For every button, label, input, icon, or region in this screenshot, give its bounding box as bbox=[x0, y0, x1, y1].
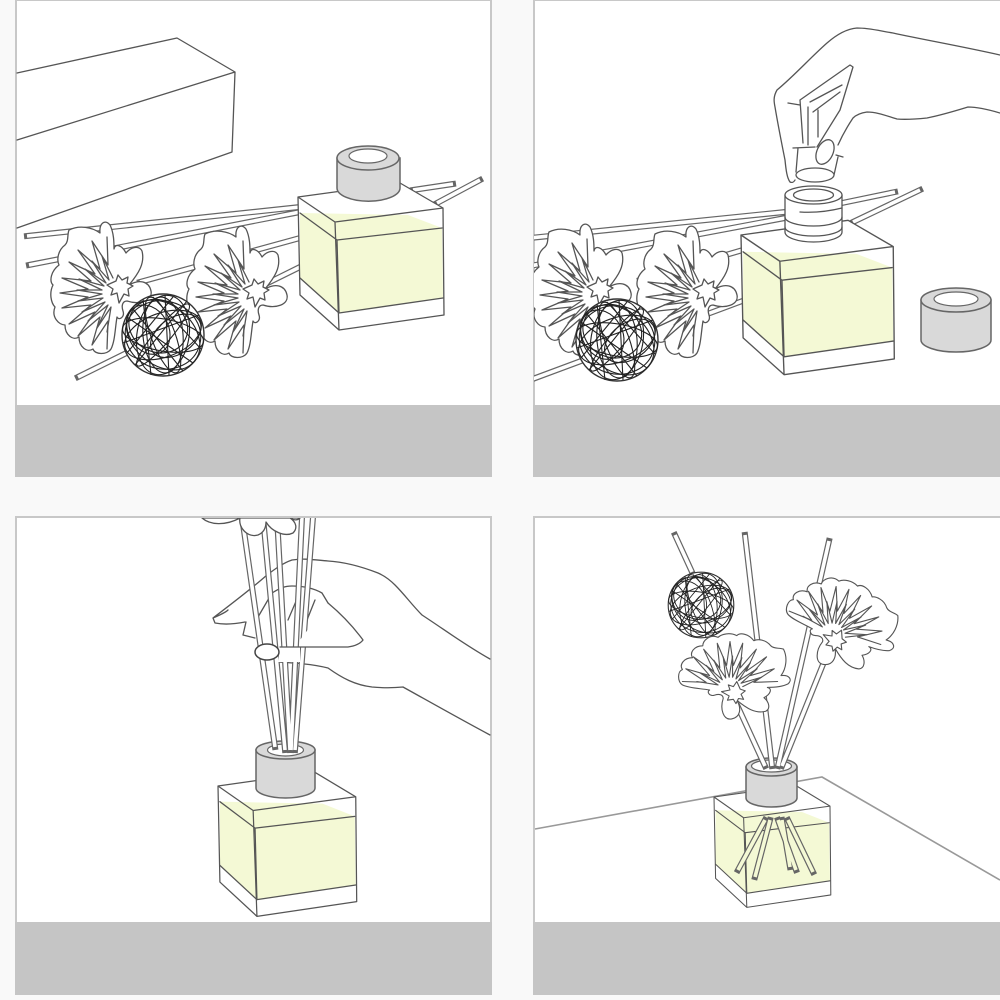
rattan ball bbox=[668, 572, 734, 638]
illustration 4 bbox=[535, 535, 1000, 907]
sola flower at top bbox=[202, 518, 300, 536]
bottle with liquid bbox=[714, 785, 831, 907]
grey cap bbox=[746, 758, 797, 807]
reeds bbox=[530, 190, 920, 380]
removed cap bbox=[921, 288, 991, 352]
caption band 4 bbox=[533, 922, 1000, 995]
caption band 2 bbox=[533, 405, 1000, 477]
sola flower right bbox=[786, 577, 898, 670]
illustration 2 bbox=[530, 28, 1000, 389]
rattan ball bbox=[575, 298, 659, 382]
thumb with nail bbox=[255, 603, 363, 662]
panel 1: contents laid out bbox=[15, 0, 492, 477]
illustration 1 bbox=[17, 38, 480, 384]
sola flower right bbox=[637, 226, 737, 358]
illustration 3 bbox=[202, 517, 490, 916]
panel 4: finished diffuser bbox=[533, 517, 1000, 995]
bottle with liquid bbox=[218, 772, 357, 916]
hand holding stopper bbox=[774, 28, 1000, 182]
reeds bbox=[242, 517, 313, 750]
rattan ball bbox=[121, 293, 205, 377]
table edge bbox=[535, 777, 1000, 880]
hand back bbox=[213, 559, 490, 735]
reeds above bottle bbox=[675, 535, 829, 766]
gift box bbox=[17, 38, 235, 228]
panel 3: inserting the reeds bbox=[15, 517, 492, 995]
caption band 3 bbox=[15, 922, 492, 995]
sola flower left bbox=[679, 634, 790, 719]
sola flower left bbox=[51, 222, 151, 354]
hand outline bbox=[213, 559, 490, 735]
sola flower left bbox=[531, 224, 631, 356]
sola flower right bbox=[187, 226, 287, 358]
bottle with liquid bbox=[741, 220, 894, 375]
reeds inside bottle bbox=[738, 820, 813, 877]
panel 2: removing the stopper bbox=[530, 0, 1000, 477]
grey cap bbox=[337, 146, 400, 201]
ribbed neck bbox=[785, 186, 842, 242]
bottle with liquid bbox=[298, 183, 444, 330]
reeds bbox=[27, 180, 480, 377]
caption band 1 bbox=[15, 405, 492, 477]
grey cap bbox=[256, 741, 315, 798]
